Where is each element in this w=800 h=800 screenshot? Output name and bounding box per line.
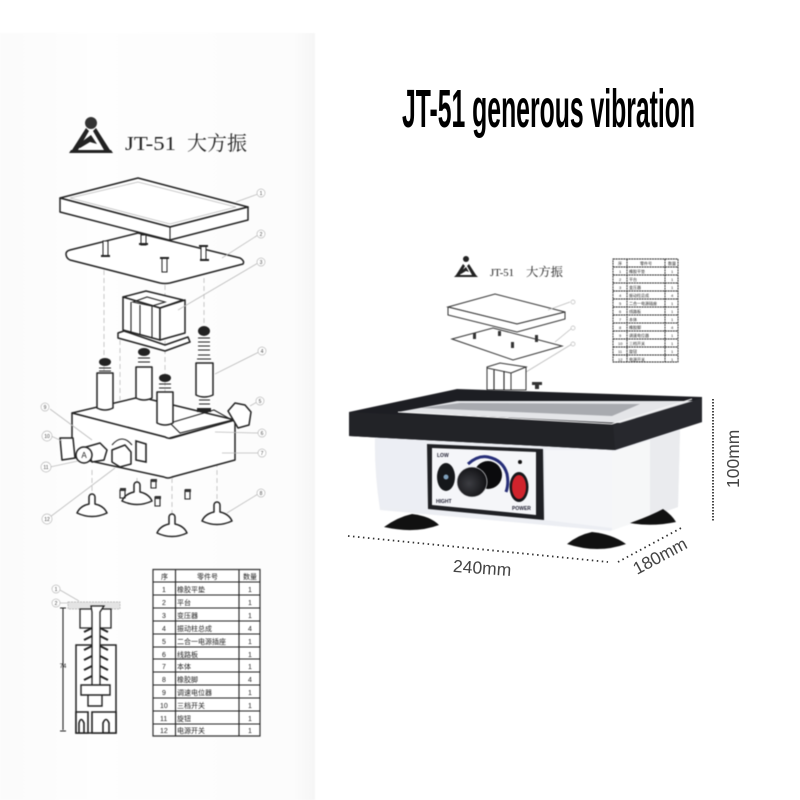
- parts table: 9: [162, 690, 166, 697]
- parts table: 本体: [177, 662, 191, 671]
- parts table: 旋钮: [177, 714, 191, 723]
- part 5: power socket: [228, 403, 251, 428]
- column section diagram: 1: [55, 587, 58, 593]
- parts table: 振动柱总成: [177, 624, 212, 633]
- parts table: 6: [162, 652, 166, 659]
- parts table: 1: [248, 690, 252, 697]
- numbered callouts: 3: [260, 260, 263, 266]
- inset tray: [448, 294, 565, 332]
- numbered callouts: 9: [44, 405, 47, 411]
- inset parts table: 5: [619, 301, 622, 306]
- numbered callouts: 8: [260, 491, 263, 497]
- column section diagram: 2: [55, 601, 58, 607]
- column section diagram: [52, 585, 120, 733]
- inset heading: JT-51: [490, 267, 514, 279]
- panel labels: LOW: [437, 453, 449, 459]
- numbered callouts: 5: [259, 399, 262, 405]
- parts table: 1: [248, 728, 252, 735]
- inset parts table: 4: [619, 293, 622, 298]
- inset parts table: 7: [619, 317, 622, 322]
- product heading JT-51: [125, 132, 247, 155]
- parts table: 1: [248, 703, 252, 710]
- product heading JT-51: 大方振: [187, 132, 247, 155]
- inset parts table: 零件号: [640, 260, 652, 266]
- parts table: 8: [162, 677, 166, 684]
- numbered callouts: 6: [261, 431, 264, 437]
- numbered callouts: 7: [261, 451, 264, 457]
- inset parts table: 1: [671, 341, 674, 346]
- part 7: main body box: [72, 397, 235, 478]
- inset parts table: 1: [671, 349, 674, 354]
- inset parts table: 10: [618, 341, 623, 346]
- three-speed switch: [437, 463, 455, 491]
- inset parts table: 1: [671, 277, 674, 282]
- panel: exploded diagram sheet: [0, 33, 315, 800]
- parts table: 零件号: [197, 572, 218, 581]
- speed dial arc: [468, 457, 508, 492]
- parts table: 1: [162, 587, 166, 594]
- parts table: 1: [248, 652, 252, 659]
- inset parts table: 调速电位器: [629, 332, 649, 338]
- inset parts table: 数量: [668, 260, 676, 266]
- parts table: 7: [162, 664, 166, 671]
- inset parts table: 12: [618, 357, 623, 362]
- panel labels: HIGHT: [436, 499, 452, 505]
- inset parts table: 1: [671, 333, 674, 338]
- parts table: 二合一电源插座: [177, 637, 226, 646]
- parts table: 1: [248, 600, 252, 607]
- numbered callouts: [41, 189, 266, 524]
- panel labels: [436, 453, 531, 512]
- parts table: 1: [248, 639, 252, 646]
- parts table: 变压器: [177, 611, 198, 620]
- dashed assembly guides: [92, 270, 217, 515]
- numbered callouts: 11: [43, 465, 49, 471]
- parts table: 电源开关: [177, 726, 205, 735]
- parts table: 1: [248, 587, 252, 594]
- inset heading: [490, 264, 563, 279]
- dimension: depth 180mm: 180mm: [629, 533, 690, 579]
- inset parts table: [613, 259, 678, 362]
- inset parts table: 6: [619, 309, 622, 314]
- inset parts table: 9: [619, 333, 622, 338]
- inset parts table: 11: [618, 349, 623, 354]
- parts table: 11: [160, 716, 167, 723]
- inset parts table: 橡胶脚: [629, 324, 641, 330]
- inset parts table: 1: [671, 301, 674, 306]
- parts table: [153, 570, 260, 736]
- speed knob: [457, 461, 502, 497]
- inset parts table: 电源开关: [629, 356, 645, 362]
- inset parts table: 1: [671, 357, 674, 362]
- inset parts table: 变压器: [629, 284, 641, 290]
- inset parts table: 1: [671, 317, 674, 322]
- mounting screws: [120, 479, 191, 506]
- numbered callouts: 2: [260, 232, 263, 238]
- inset heading: 大方振: [526, 264, 563, 279]
- inset parts table: 3: [619, 285, 622, 290]
- inset: small exploded diagram: [448, 256, 678, 390]
- parts table: 序: [161, 572, 168, 581]
- inset callout lines: [526, 300, 575, 372]
- parts table: 1: [248, 664, 252, 671]
- control panel: [427, 444, 544, 520]
- inset parts table: 本体: [629, 316, 637, 322]
- parts table: 平台: [177, 598, 191, 607]
- parts table: 4: [248, 677, 252, 684]
- dimension: height 100mm: [713, 399, 743, 522]
- icon: brand logo: [69, 117, 113, 153]
- parts table: 橡胶脚: [177, 675, 198, 684]
- parts 9-12: switches and knob: A: [81, 451, 87, 460]
- inset parts table: 橡胶平垫: [629, 268, 645, 274]
- inset transformer: [487, 363, 542, 390]
- parts table: 5: [162, 639, 166, 646]
- part 8: suction feet: [77, 482, 232, 536]
- icon: small brand logo: [454, 256, 478, 277]
- parts 9-12: switches and knob: [60, 438, 146, 467]
- inset parts table: 2: [619, 277, 622, 282]
- parts table: 橡胶平垫: [177, 585, 205, 594]
- part 4: vibration columns: [97, 326, 213, 425]
- numbered callouts: 1: [260, 191, 263, 197]
- inset parts table: 1: [671, 269, 674, 274]
- dimension: width 240mm: 240mm: [452, 556, 512, 580]
- inset parts table: 1: [671, 285, 674, 290]
- dimension: width 240mm: [348, 536, 608, 580]
- inset parts table: 三档开关: [629, 340, 645, 346]
- inset plate: [452, 328, 562, 360]
- part 1: rubber pad tray: [60, 178, 248, 240]
- product photo: vibrator machine: [349, 389, 702, 549]
- parts table: 调速电位器: [177, 688, 212, 697]
- panel labels: POWER: [512, 506, 531, 512]
- parts table: 4: [162, 626, 166, 633]
- inset parts table: 8: [619, 325, 622, 330]
- black rubber tray: [349, 389, 702, 450]
- numbered callouts: 4: [261, 349, 264, 355]
- inset parts table: 1: [671, 309, 674, 314]
- inset parts table: 序: [618, 260, 622, 266]
- numbered callouts: 10: [44, 434, 50, 440]
- parts table: 三档开关: [177, 701, 205, 710]
- column section diagram: 74: [60, 664, 67, 670]
- dimension: height 100mm: 100mm: [723, 430, 743, 488]
- red power switch: [510, 460, 528, 502]
- inset parts table: 1: [619, 269, 622, 274]
- inset parts table: 4: [671, 293, 674, 298]
- inset parts table: 振动柱总成: [629, 292, 649, 298]
- product heading JT-51: JT-51: [125, 133, 176, 155]
- parts table: 1: [248, 613, 252, 620]
- part 2: platform plate: [66, 233, 244, 284]
- parts table: 3: [162, 613, 166, 620]
- machine body: [375, 428, 680, 531]
- part 3: transformer: [118, 291, 190, 351]
- inset parts table: 线路板: [629, 308, 641, 314]
- parts table: 10: [160, 703, 168, 710]
- inset parts table: 4: [671, 325, 674, 330]
- numbered callouts: 12: [44, 517, 50, 523]
- inset parts table: 旋钮: [629, 348, 637, 354]
- inset parts table: 二合一电源插座: [629, 300, 657, 306]
- parts table: 2: [162, 600, 166, 607]
- inset parts table: 平台: [629, 276, 637, 282]
- parts table: 4: [248, 626, 252, 633]
- parts table: 12: [160, 728, 168, 735]
- parts table: 线路板: [177, 650, 198, 659]
- parts table: 1: [248, 716, 252, 723]
- parts table: 数量: [243, 572, 257, 581]
- suction feet: [384, 509, 676, 549]
